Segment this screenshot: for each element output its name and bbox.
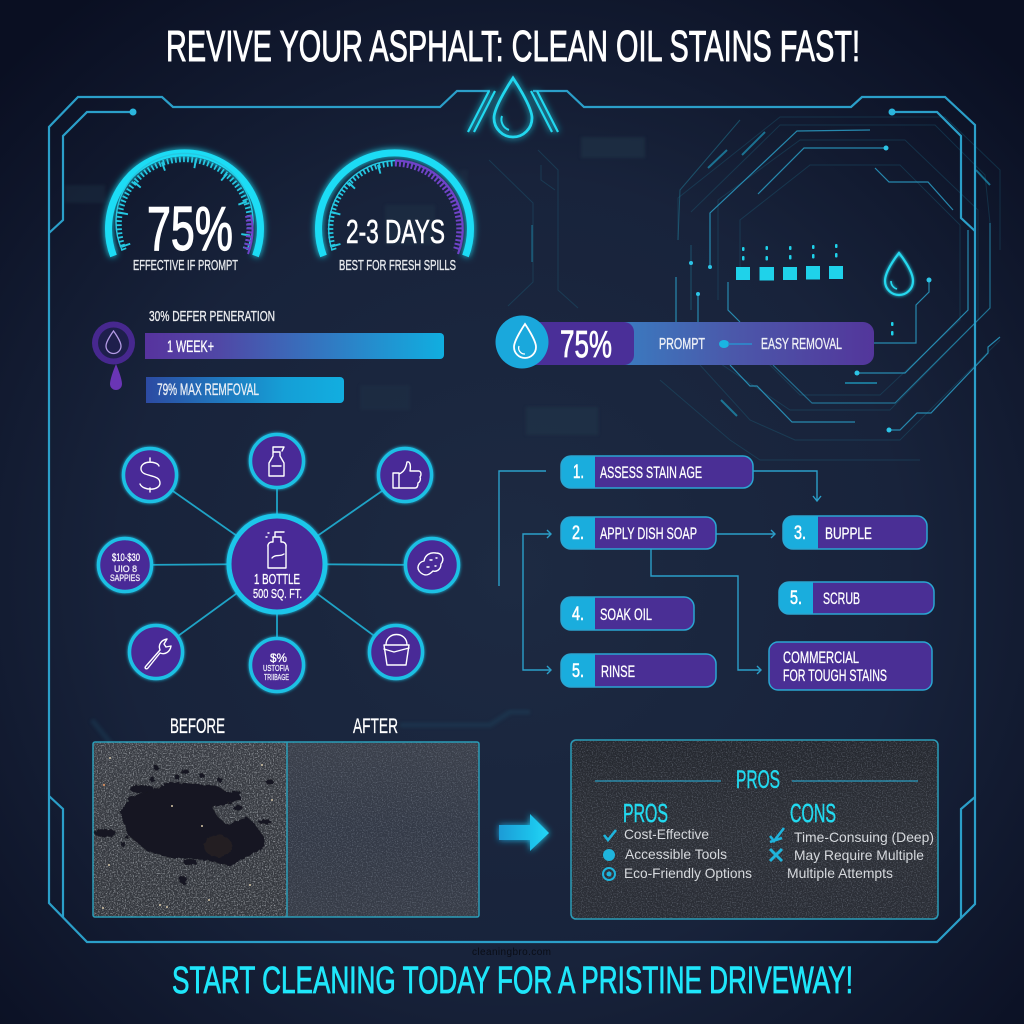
pros column [603, 798, 752, 881]
step 3: BUPPLE [825, 524, 872, 543]
node: tagged text: USTOFIA [263, 664, 289, 673]
node: spray bottle [250, 434, 304, 488]
callout pill: 75% prompt easy removal: PROMPT [659, 336, 705, 353]
step 2: APPLY DISH SOAP [600, 524, 697, 543]
step 3 [783, 516, 927, 549]
node: sponge [406, 538, 458, 592]
before and after comparison [93, 715, 479, 917]
step 5 rinse [561, 654, 716, 687]
penetration bars [92, 308, 444, 403]
bar: 1 week: 1 WEEK+ [167, 337, 214, 356]
step 5 scrub: SCRUB [823, 589, 860, 608]
data squares [736, 244, 894, 336]
node: wrench [130, 626, 182, 678]
pros column: Eco-Friendly Options [624, 865, 752, 881]
step 2: 2. [572, 523, 584, 544]
pros column: Cost-Effective [624, 826, 709, 842]
callout pill: 75% prompt easy removal: 75% [560, 324, 612, 366]
caption: BEST FOR FRESH SPILLS [339, 257, 456, 274]
step 4: 4. [572, 604, 584, 625]
icon: purple oil drop [92, 322, 135, 390]
node: price text [98, 538, 152, 592]
step 4 [561, 597, 694, 630]
hub: 1 bottle 500 sq ft [229, 516, 325, 612]
bar: removal: 79% MAX REMFOVAL [157, 380, 259, 399]
node: price text: $10-$30 [112, 552, 140, 564]
heading: PROS [736, 766, 780, 794]
node: tagged text [250, 638, 304, 692]
commercial box [769, 642, 932, 690]
step 2 [561, 517, 716, 549]
step 4: SOAK OIL [600, 605, 652, 624]
value: 2-3 DAYS [346, 213, 445, 250]
bar: removal [146, 377, 344, 403]
pros column: PROS [623, 798, 668, 828]
cons column: May Require Multiple [794, 847, 924, 863]
watermark: cleaningbro.com [472, 947, 551, 958]
before label: BEFORE [170, 715, 225, 738]
node: price text: SAPPIES [110, 573, 140, 583]
hub: 1 bottle 500 sq ft: 1 BOTTLE [254, 572, 300, 588]
step 3: 3. [794, 523, 806, 544]
node: thumbs up [378, 448, 432, 502]
caption: EFFECTIVE IF PROMPT [133, 257, 238, 274]
after label: AFTER [353, 715, 398, 738]
photo: stained asphalt [93, 742, 287, 917]
node: tagged text: $% [270, 651, 287, 665]
circuit decoration: octagon lines and data squares [660, 117, 1000, 460]
bar heading: 30% DEFER PENERATION [149, 308, 275, 325]
callout pill: 75% prompt easy removal [496, 316, 874, 368]
main frame [49, 91, 975, 942]
commercial box: COMMERCIAL [783, 648, 859, 667]
gauge: 2-3 days [318, 153, 470, 274]
step 1 [561, 456, 753, 488]
icon: top water drop emblem [468, 78, 558, 137]
node: dollar [124, 448, 176, 502]
value: 75% [147, 195, 233, 264]
cons column: Time-Consuing (Deep) [794, 829, 934, 845]
hub: 1 bottle 500 sq ft: 500 SQ. FT. [253, 586, 302, 601]
step 5 rinse: RINSE [601, 662, 635, 681]
commercial box: FOR TOUGH STAINS [783, 666, 887, 685]
arrow [499, 814, 549, 851]
node: bucket [370, 626, 422, 678]
photo: clean asphalt [287, 742, 479, 917]
step 1: ASSESS STAIN AGE [600, 463, 702, 482]
node: price text: UIO 8 [114, 564, 137, 574]
process flow connectors [499, 471, 821, 674]
hub and spoke diagram [98, 434, 458, 692]
step 5 scrub: 5. [790, 588, 802, 609]
gauge: 75% effective [108, 153, 260, 274]
callout pill: 75% prompt easy removal: EASY REMOVAL [761, 336, 842, 353]
icon: small drop [885, 253, 913, 295]
step 5 rinse: 5. [572, 661, 584, 682]
panel: pros and cons [571, 740, 938, 919]
step 5 scrub [779, 582, 934, 614]
node: tagged text: TRIIBAGE [264, 673, 289, 682]
cons column: CONS [790, 798, 836, 828]
bar: 1 week [145, 333, 444, 359]
pros column: Accessible Tools [625, 846, 727, 862]
cons column [770, 798, 934, 881]
cons column: Multiple Attempts [787, 865, 893, 881]
step 1: 1. [573, 462, 584, 483]
